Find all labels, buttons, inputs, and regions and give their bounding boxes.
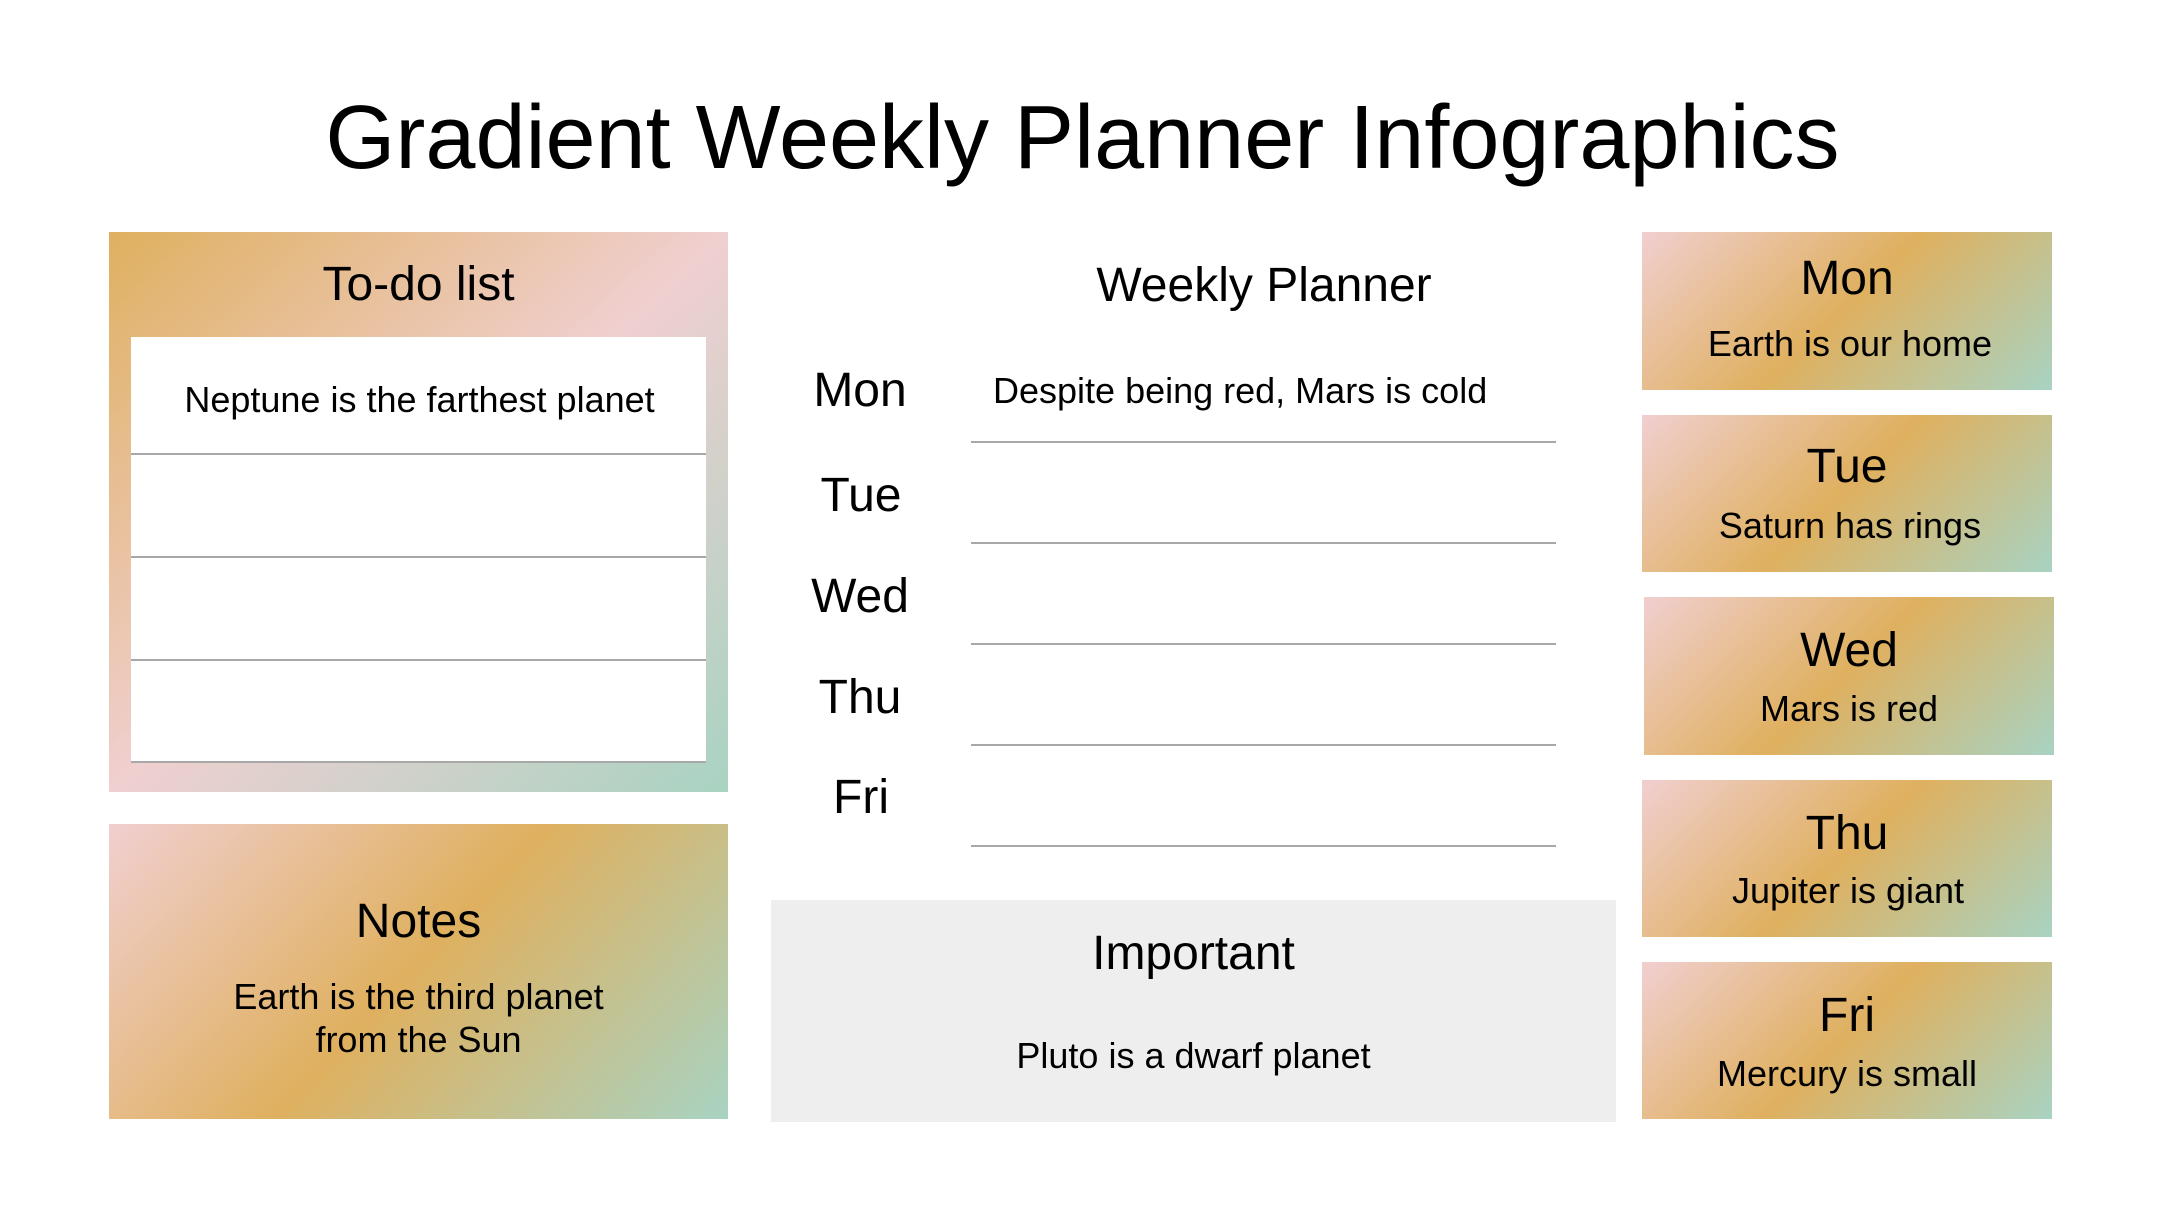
heading: weekly planner: Weekly Planner [1096, 259, 1432, 312]
card: Mon [1642, 232, 2052, 390]
card: Tue [1642, 415, 2052, 572]
planner day: Mon: Mon [813, 364, 907, 417]
heading: notes: Notes [356, 895, 481, 948]
important text: Pluto is a dwarf planet [1016, 1035, 1371, 1076]
panel: important [771, 900, 1616, 1122]
white list box [131, 337, 706, 763]
panel: weekly planner [811, 259, 1556, 847]
card heading: Fri: Fri [1819, 989, 1875, 1042]
panel: to-do list [109, 232, 728, 792]
card text: Fri: Mercury is small [1717, 1053, 1977, 1094]
heading: to-do list: To-do list [322, 258, 515, 311]
card text: Mon: Earth is our home [1708, 323, 1992, 364]
planner day: Wed: Wed [811, 570, 909, 623]
card heading: Thu: Thu [1806, 807, 1888, 860]
card heading: Mon: Mon [1800, 252, 1894, 305]
card text: Tue: Saturn has rings [1719, 505, 1981, 546]
list item 1: Neptune is the farthest planet [184, 379, 655, 420]
planner day: Tue: Tue [821, 469, 901, 522]
panel: notes [109, 824, 728, 1119]
planner entry: Mon: Despite being red, Mars is cold [993, 370, 1487, 411]
notes text: from the Sun [315, 1019, 522, 1060]
card: Fri [1642, 962, 2052, 1119]
card: Thu [1642, 780, 2052, 937]
notes text [233, 976, 604, 1060]
planner day: Fri: Fri [833, 771, 889, 824]
card text: Wed: Mars is red [1760, 688, 1938, 729]
planner day: Thu: Thu [819, 671, 901, 724]
heading: important: Important [1092, 927, 1295, 980]
card: Wed [1644, 597, 2054, 755]
card heading: Tue: Tue [1807, 440, 1887, 493]
card text: Thu: Jupiter is giant [1732, 870, 1964, 911]
title: Gradient Weekly Planner Infographics [325, 88, 1840, 188]
card heading: Wed: Wed [1800, 624, 1898, 677]
notes text: Earth is the third planet [233, 976, 604, 1017]
